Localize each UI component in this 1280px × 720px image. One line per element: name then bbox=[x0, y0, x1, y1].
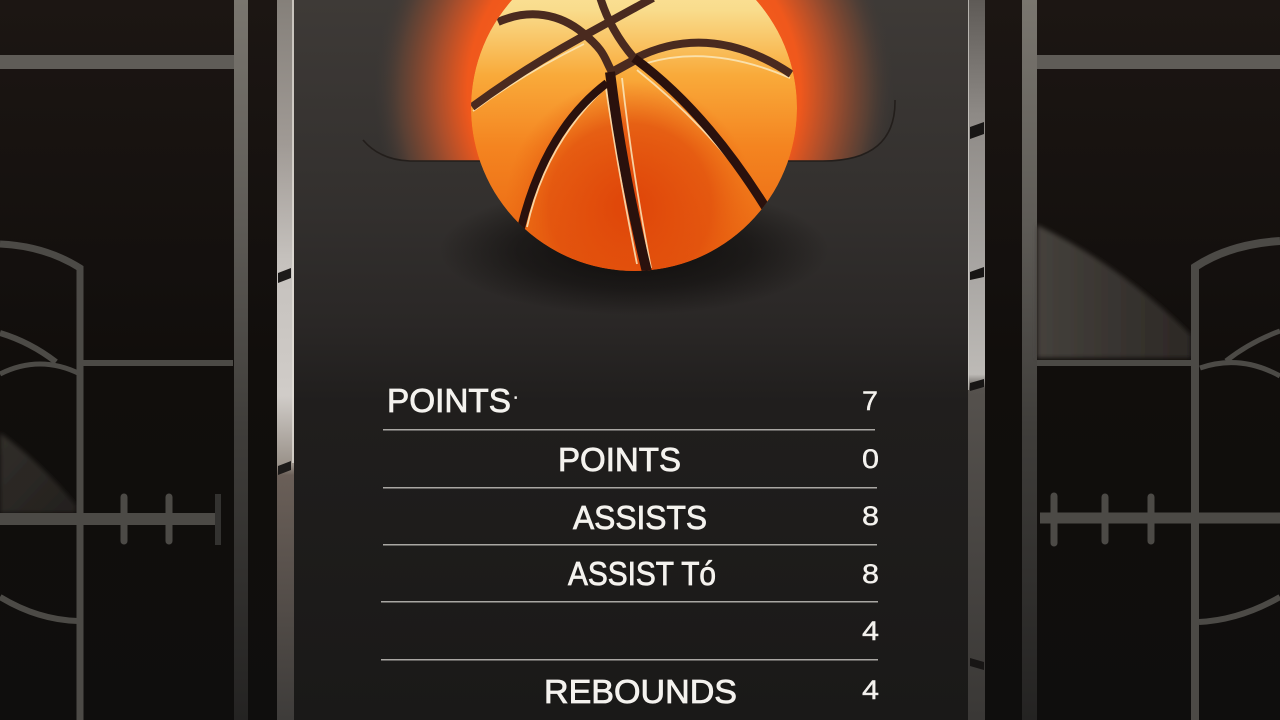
row 4: assist to bbox=[381, 555, 879, 602]
row 6: rebounds: REBOUNDS bbox=[544, 673, 737, 710]
icon: basketball bbox=[471, 0, 797, 272]
right metallic strip bbox=[967, 0, 985, 720]
row 1: points bbox=[383, 382, 878, 430]
row 2: points bbox=[383, 441, 879, 488]
stats table bbox=[381, 382, 879, 710]
right background panel bbox=[985, 0, 1280, 720]
row 6: rebounds bbox=[544, 673, 879, 710]
central dark panel bbox=[294, 0, 968, 720]
row 2: points: POINTS bbox=[558, 441, 681, 478]
ball shadow bbox=[439, 185, 829, 315]
row 6: rebounds: 4 bbox=[862, 675, 879, 705]
row 4: assist to: ASSIST Tó bbox=[568, 555, 716, 592]
row 4: assist to: 8 bbox=[862, 559, 879, 589]
row 1: points: · bbox=[513, 389, 518, 406]
row 1: points: 7 bbox=[862, 386, 878, 416]
top tab with orange glow bbox=[360, 0, 895, 161]
row 3: assists bbox=[383, 499, 879, 546]
row 2: points: 0 bbox=[862, 444, 879, 474]
row 5: blank label: 4 bbox=[862, 616, 879, 646]
right court line drawing bbox=[1022, 0, 1280, 720]
left court line drawing bbox=[0, 0, 248, 720]
row 1: points: POINTS bbox=[387, 382, 511, 419]
left metallic strip bbox=[277, 0, 294, 720]
row 3: assists: 8 bbox=[862, 501, 879, 531]
left background panel bbox=[0, 0, 277, 720]
row 3: assists: ASSISTS bbox=[573, 499, 707, 536]
